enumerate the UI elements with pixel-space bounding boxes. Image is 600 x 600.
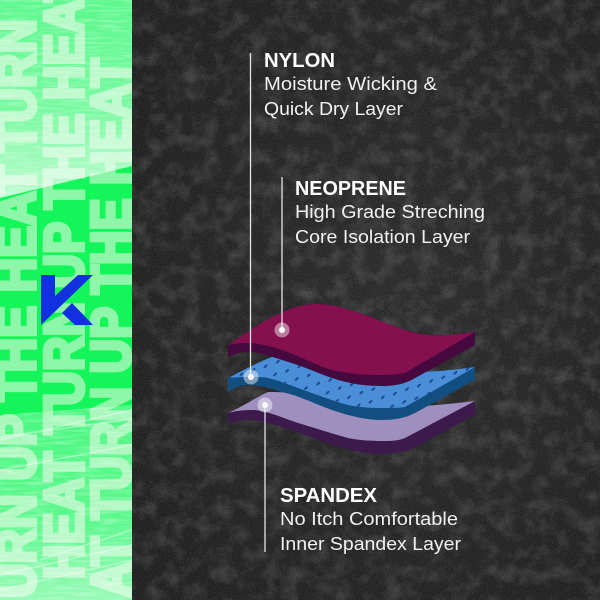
text block: nylon: Moisture Wicking & <box>264 74 437 94</box>
panel: green typographic strip <box>0 0 143 600</box>
text block: neoprene: High Grade Streching <box>295 202 485 222</box>
middle layer: neoprene <box>228 357 475 420</box>
top washed-out overlay <box>0 0 132 200</box>
callout: nylon pointer line <box>244 53 258 384</box>
repeating slogan columns: AT <box>81 536 143 597</box>
text block: neoprene <box>295 178 485 247</box>
text block: nylon: NYLON <box>264 50 335 72</box>
callout: spandex pointer line <box>258 398 272 552</box>
text block: neoprene: NEOPRENE <box>295 178 406 200</box>
repeating slogan columns: HEAT <box>34 452 96 579</box>
text block: nylon: Quick Dry Layer <box>264 99 403 119</box>
dark textured background <box>132 0 600 600</box>
text block: neoprene: Core Isolation Layer <box>295 227 470 247</box>
repeating slogan columns <box>0 0 143 598</box>
text block: spandex: SPANDEX <box>280 485 378 507</box>
callout: neoprene pointer line <box>274 177 290 338</box>
text block: spandex: Inner Spandex Layer <box>280 534 461 554</box>
top layer: nylon <box>228 304 475 386</box>
bottom washed-out overlay <box>0 400 132 600</box>
text block: nylon <box>264 50 437 119</box>
text block: spandex: No Itch Comfortable <box>280 509 458 529</box>
icon: K logo <box>41 275 93 325</box>
text block: spandex <box>280 485 461 554</box>
bottom layer: spandex <box>228 392 475 454</box>
layered fabric diagram <box>228 304 475 454</box>
repeating slogan columns: TURN UP THE HEAT <box>81 58 143 520</box>
